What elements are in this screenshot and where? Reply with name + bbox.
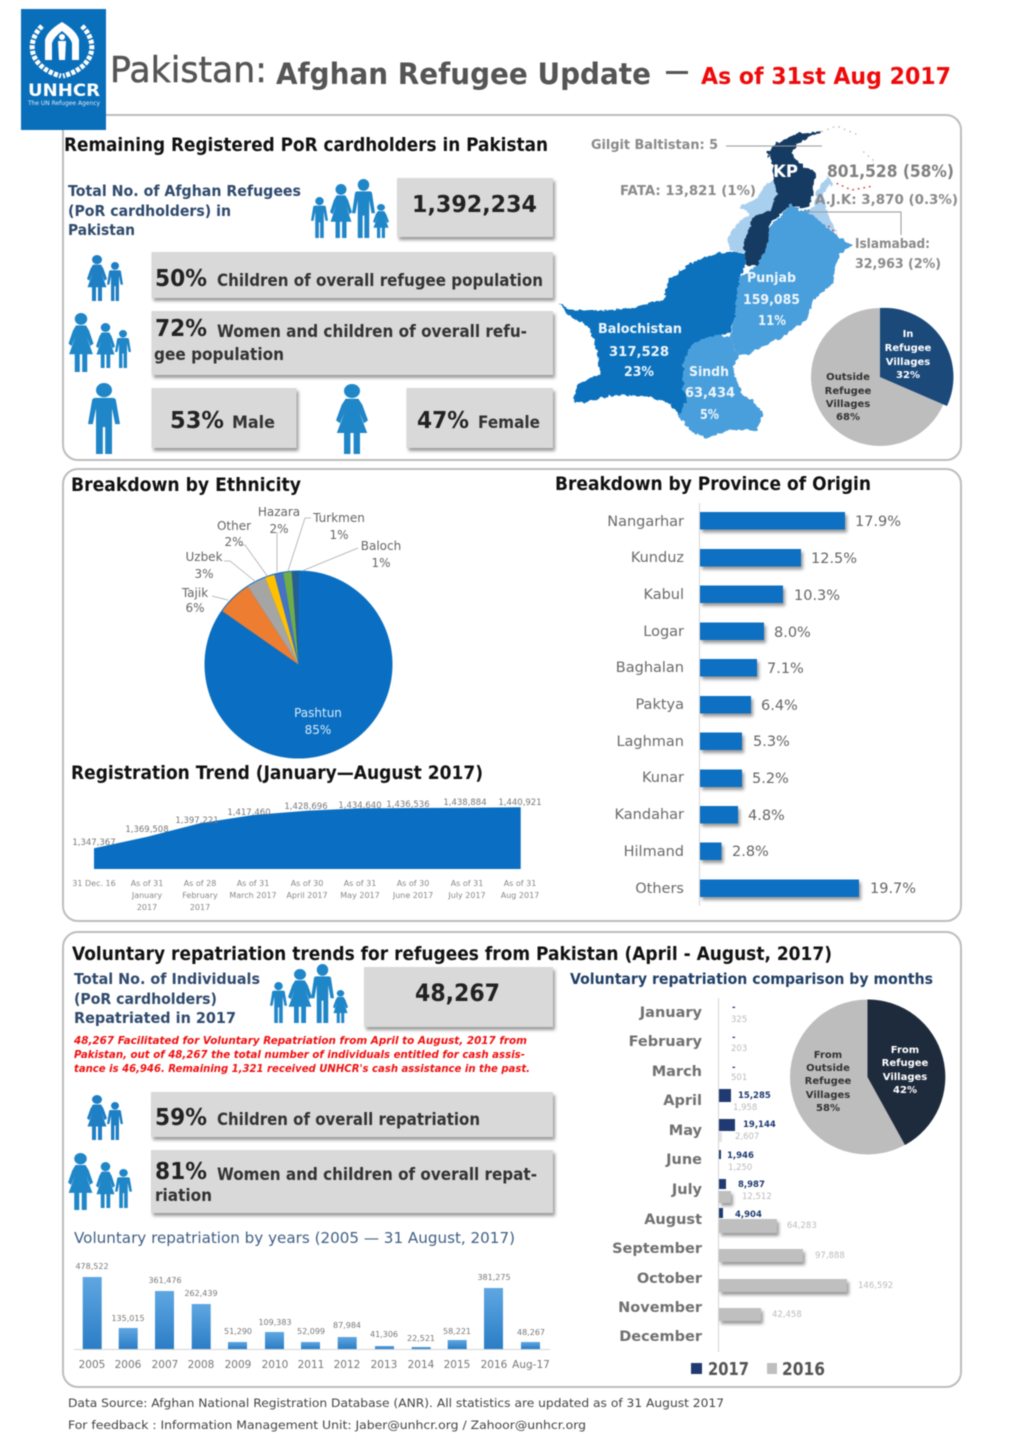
bar chart: province of origin: Kandahar — [615, 807, 684, 823]
pie chart: ethnicity: Other — [217, 519, 251, 533]
heading: breakdown by ethnicity: Breakdown by Ethnicity — [71, 474, 302, 496]
text: total number of refugees: (PoR cardholders) in — [68, 202, 231, 220]
icon: children — [87, 255, 123, 301]
pie: from refugee villages: Refugee — [805, 1076, 852, 1087]
map label: Islamabad — [805, 212, 941, 272]
bar chart: repatriation by years: 381,275 — [477, 1273, 511, 1282]
text: total number of refugees — [68, 182, 301, 239]
area chart: registration trend: As of 30 — [291, 879, 323, 888]
bar chart: province of origin: Others — [635, 881, 684, 897]
bar chart: repatriation by years: 2007 — [152, 1359, 178, 1371]
legend — [691, 1359, 825, 1380]
bar chart: repatriation by years: 51,290 — [224, 1327, 252, 1336]
bar chart: comparison by months: October — [637, 1271, 703, 1287]
map label: Punjab: 159,085 — [743, 292, 800, 308]
map label: Punjab: Punjab — [747, 270, 796, 286]
stat: 50% children: Children of overall refugee population — [217, 271, 543, 291]
bar chart: province of origin: Paktya — [635, 697, 684, 713]
bar chart: comparison by months: - — [732, 1003, 736, 1013]
area chart: registration trend: 1,440,921 — [498, 798, 542, 808]
footer: data source: For feedback : Information Management Unit: Jaber@unhcr.org / Zahoor@unhcr.org — [68, 1418, 586, 1432]
stat: 81% women and children: 81% — [155, 1159, 207, 1185]
text: total number of refugees: Total No. of Afghan Refugees — [68, 182, 301, 200]
bar chart: repatriation by years: 2010 — [262, 1359, 288, 1371]
bar chart: comparison by months: July — [671, 1182, 703, 1198]
stat: 50% children — [152, 252, 553, 298]
pie chart: ethnicity: Pashtun — [294, 706, 342, 720]
map label: Gilgit Baltistan: Gilgit Baltistan: 5 — [591, 137, 718, 153]
text: total individuals repatriated: (PoR cardholders) — [74, 990, 217, 1008]
footer: data source — [68, 1396, 724, 1432]
heading: breakdown by province: Breakdown by Province of Origin — [555, 473, 871, 495]
text: red note — [73, 1035, 530, 1075]
area chart: registration trend: 2017 — [137, 903, 157, 912]
bar chart: comparison by months: May — [669, 1123, 703, 1139]
pie: in / outside refugee villages: 32% — [896, 370, 920, 381]
area chart: registration trend: 1,347,367 — [72, 838, 116, 848]
stat: total refugees — [397, 178, 553, 237]
area chart: registration trend: As of 28 — [184, 879, 216, 888]
icon: female — [336, 384, 368, 454]
bar chart: province of origin: 8.0% — [774, 625, 811, 641]
pie: from refugee villages: Outside — [806, 1063, 850, 1074]
bar chart: province of origin: Kunduz — [631, 550, 684, 566]
icon: male — [88, 383, 120, 454]
map label: Punjab: 11% — [758, 313, 786, 329]
pie: from refugee villages: 58% — [816, 1103, 840, 1114]
area chart: registration trend: 1,417,460 — [227, 808, 271, 818]
area chart: registration trend: 1,397,221 — [175, 816, 219, 826]
bar chart: repatriation by years: 58,221 — [443, 1327, 471, 1336]
stat: 81% women and children: Women and children of overall repat- — [217, 1165, 537, 1185]
icon: woman and children — [68, 1153, 132, 1210]
map label: Balochistan: Balochistan — [598, 321, 682, 337]
map label: Islamabad: 32,963 (2%) — [855, 256, 941, 272]
stat: 72% women and children: 72% — [155, 316, 207, 342]
area chart: registration trend: 1,369,508 — [125, 825, 169, 835]
stat: 59% children: Children of overall repatriation — [217, 1110, 480, 1130]
bar chart: province of origin: Kunar — [642, 770, 684, 786]
bar chart: comparison by months: 1,250 — [728, 1163, 752, 1173]
bar chart: comparison by months: June — [665, 1152, 702, 1168]
stat: 59% children — [151, 1092, 553, 1137]
stat: 53% male — [152, 388, 296, 448]
bar chart: province of origin: 12.5% — [811, 551, 857, 567]
bar chart: repatriation by years: 2016 — [481, 1359, 508, 1371]
text: red note: Pakistan, out of 48,267 the total number of individuals entitled for cash assis- — [74, 1049, 525, 1061]
heading: remaining registered: Remaining Registered PoR cardholders in Pakistan — [64, 134, 548, 156]
title — [110, 50, 951, 91]
bar chart: comparison by months: 64,283 — [787, 1221, 817, 1231]
title: Pakistan: — [110, 50, 267, 91]
bar chart: comparison by months: 501 — [731, 1073, 747, 1083]
pie chart: ethnicity: Tajik — [181, 586, 208, 600]
bar chart: repatriation by years: 2011 — [298, 1359, 324, 1371]
map label: Balochistan — [598, 321, 682, 380]
area chart: registration trend: July 2017 — [447, 891, 486, 900]
area chart: registration trend: 1,434,640 — [338, 801, 382, 811]
area chart: registration trend: March 2017 — [229, 891, 277, 900]
legend: 2017 — [708, 1359, 749, 1380]
bar chart: province of origin: 19.7% — [870, 881, 916, 897]
bar chart: repatriation by years: 2005 — [79, 1359, 105, 1371]
area chart: registration trend: As of 30 — [397, 879, 429, 888]
bar chart: comparison by months: September — [612, 1241, 703, 1257]
bar chart: province of origin: Kabul — [643, 587, 684, 603]
area chart: registration trend: February — [182, 891, 218, 900]
stat: 53% male: 53% — [170, 408, 224, 434]
bar chart: repatriation by years: 2009 — [225, 1359, 251, 1371]
pie chart: ethnicity: 2% — [224, 535, 244, 549]
bar chart: comparison by months: 325 — [731, 1015, 747, 1025]
bar chart: province of origin: Hilmand — [624, 844, 684, 860]
area chart: registration trend: June 2017 — [392, 891, 433, 900]
pie chart: ethnicity: 85% — [305, 723, 331, 737]
icon: family — [270, 964, 348, 1023]
bar chart: comparison by months: 203 — [731, 1044, 747, 1054]
bar chart: repatriation by years: 2006 — [115, 1359, 142, 1371]
bar chart: repatriation by years: 2014 — [408, 1359, 435, 1371]
bar chart: province of origin: Baghalan — [616, 660, 684, 676]
bar chart: comparison by months: March — [652, 1064, 702, 1080]
pie: from refugee villages: 42% — [893, 1085, 917, 1096]
pie: in / outside refugee villages: Outside — [826, 372, 870, 383]
map label: KP: 801,528 (58%) — [827, 162, 954, 182]
bar chart: comparison by months: - — [732, 1063, 736, 1073]
pie: in / outside refugee villages: Villages — [886, 357, 930, 368]
bar chart: comparison by months: 15,285 — [738, 1091, 771, 1101]
area chart: registration trend: January — [131, 891, 162, 900]
bar chart: comparison by months: 1,946 — [727, 1151, 754, 1161]
bar chart: province of origin: Nangarhar — [607, 514, 684, 530]
icon: children — [87, 1095, 123, 1140]
area chart: registration trend: 1,436,536 — [386, 800, 430, 810]
panel: remaining registered PoR cardholders — [63, 115, 961, 460]
bar chart: repatriation by years: 361,476 — [148, 1276, 182, 1285]
area chart: registration trend: As of 31 — [237, 879, 269, 888]
bar chart: province of origin: 4.8% — [748, 808, 785, 824]
area chart: registration trend: As of 31 — [344, 879, 376, 888]
bar chart: repatriation by years: 2008 — [188, 1359, 214, 1371]
bar chart: province of origin: 10.3% — [794, 588, 840, 604]
area chart: registration trend: As of 31 — [504, 879, 536, 888]
bar chart: repatriation by years: 2015 — [444, 1359, 470, 1371]
bar chart: province of origin: Laghman — [616, 734, 684, 750]
stat: 47% female: Female — [478, 413, 540, 433]
bar chart: province of origin: 17.9% — [855, 514, 901, 530]
bar chart: repatriation by years: 41,306 — [370, 1330, 398, 1339]
pie: in / outside refugee villages: Villages — [826, 399, 870, 410]
text: red note: 48,267 Facilitated for Voluntary Repatriation from April to August, 2017 from — [73, 1035, 527, 1047]
map label: Sindh: 5% — [700, 407, 719, 423]
pie: from refugee villages: From — [814, 1050, 842, 1061]
bar chart: comparison by months: - — [732, 1033, 736, 1043]
bar chart: comparison by months: December — [619, 1329, 703, 1345]
text: red note: tance is 46,946. Remaining 1,321 received UNHCR's cash assistance in the past. — [74, 1063, 530, 1075]
area chart: registration trend: As of 31 — [131, 879, 163, 888]
text: total individuals repatriated — [74, 970, 260, 1027]
map label: Sindh — [685, 364, 735, 423]
map label: FATA: FATA: 13,821 (1%) — [620, 183, 756, 199]
stat: 72% women and children: Women and children of overall refu- — [217, 322, 527, 342]
bar chart: province of origin: 5.3% — [753, 734, 790, 750]
stat: 47% female: 47% — [417, 408, 469, 434]
legend: 2016 — [782, 1359, 825, 1380]
bar chart: repatriation by years: 262,439 — [184, 1289, 218, 1298]
stat: 59% children: 59% — [155, 1105, 207, 1131]
stat: total repatriated: 48,267 — [415, 979, 500, 1007]
area chart: registration trend: 1,438,884 — [443, 798, 487, 808]
bar chart: repatriation by years: 478,522 — [75, 1262, 109, 1271]
area chart: registration trend: 2017 — [190, 903, 210, 912]
area chart: registration trend: Aug 2017 — [501, 891, 539, 900]
bar chart: province of origin: 7.1% — [767, 661, 804, 677]
pie chart: ethnicity: 3% — [194, 567, 214, 581]
bar chart: province of origin: 5.2% — [752, 771, 789, 787]
text: total individuals repatriated: Total No. of Individuals — [74, 970, 260, 988]
logo: UNHCR: The UN Refugee Agency — [27, 100, 100, 107]
bar chart: comparison by months: April — [663, 1093, 702, 1109]
heading: comparison by months: Voluntary repatriation comparison by months — [570, 970, 933, 988]
stat: 81% women and children: riation — [155, 1186, 212, 1206]
pie: from refugee villages: From — [891, 1045, 919, 1056]
bar chart: repatriation by years: 22,521 — [407, 1334, 435, 1343]
stat: 53% male: Male — [232, 413, 275, 433]
bar chart: comparison by months: 2,607 — [735, 1132, 759, 1142]
pie chart: ethnicity: 1% — [371, 556, 391, 570]
pie: from refugee villages: Refugee — [882, 1058, 929, 1069]
bar chart: province of origin: 6.4% — [761, 698, 798, 714]
map label: AJK: A.J.K: 3,870 (0.3%) — [815, 192, 958, 208]
bar chart: comparison by months: 97,888 — [815, 1251, 845, 1261]
area chart: registration trend: 1,428,696 — [284, 802, 328, 812]
bar chart: comparison by months: August — [644, 1212, 702, 1228]
stat: 72% women and children: gee population — [154, 345, 284, 365]
map label: Balochistan: 23% — [624, 364, 654, 380]
area chart: registration trend: As of 31 — [451, 879, 483, 888]
panel: voluntary repatriation — [63, 932, 961, 1387]
bar chart: repatriation by years: Aug-17 — [512, 1359, 550, 1371]
stat: 81% women and children — [151, 1150, 553, 1213]
bar chart: comparison by months: 1,958 — [733, 1103, 757, 1113]
bar chart: comparison by months: 42,458 — [772, 1310, 802, 1320]
pie chart: ethnicity: 1% — [329, 528, 349, 542]
map of Pakistan — [558, 126, 958, 438]
footer: data source: Data Source: Afghan National Registration Database (ANR). All statistics are updated as of 31 August 2017 — [68, 1396, 724, 1410]
pie: from refugee villages: Villages — [806, 1090, 850, 1101]
map label: Islamabad: Islamabad: — [855, 236, 930, 252]
logo: UNHCR: UNHCR — [28, 81, 100, 101]
map label: Sindh: 63,434 — [685, 385, 735, 401]
bar chart: repatriation by years: 109,383 — [258, 1318, 292, 1327]
bar chart: repatriation by years: 48,267 — [517, 1328, 545, 1337]
map label: KP: KP — [773, 162, 798, 182]
map label: Balochistan: 317,528 — [609, 344, 669, 360]
bar chart: province of origin: 2.8% — [732, 844, 769, 860]
bar chart: comparison by months — [612, 998, 893, 1352]
bar chart: comparison by months: 4,904 — [735, 1210, 762, 1220]
pie chart: ethnicity: Turkmen — [312, 511, 365, 525]
area chart: registration trend: 31 Dec. 16 — [72, 879, 116, 888]
map label: KP — [773, 162, 954, 182]
heading: repatriation by years: Voluntary repatriation by years (2005 — 31 August, 2017) — [74, 1229, 515, 1247]
bar chart: repatriation by years: 52,099 — [297, 1327, 325, 1336]
pie chart: ethnicity: 6% — [185, 601, 205, 615]
text: total number of refugees: Pakistan — [68, 221, 135, 239]
pie: in / outside refugee villages — [811, 308, 953, 446]
area chart: registration trend: April 2017 — [286, 891, 328, 900]
title: Afghan Refugee Update — [276, 57, 651, 91]
bar chart: comparison by months: 12,512 — [742, 1192, 772, 1202]
pie chart: ethnicity: Uzbek — [185, 550, 223, 564]
bar chart: comparison by months: 146,592 — [858, 1281, 893, 1291]
map label: Sindh: Sindh — [689, 364, 729, 380]
area chart: registration trend — [72, 798, 542, 912]
bar chart: comparison by months: January — [639, 1005, 703, 1021]
bar chart: repatriation by years: 87,984 — [333, 1321, 361, 1330]
area chart: registration trend: May 2017 — [340, 891, 380, 900]
icon: woman and children — [68, 313, 131, 372]
stat: 47% female — [406, 388, 553, 448]
bar chart: province of origin: Logar — [643, 624, 684, 640]
bar chart: comparison by months: November — [618, 1300, 703, 1316]
heading: voluntary repatriation trends: Voluntary repatriation trends for refugees from Pakistan (April - August, 2017) — [72, 943, 832, 965]
logo: UNHCR — [21, 9, 106, 130]
pie chart: ethnicity: 2% — [269, 522, 289, 536]
bar chart: comparison by months: 19,144 — [743, 1120, 776, 1130]
bar chart: repatriation by years: 2013 — [371, 1359, 397, 1371]
pie: from refugee villages — [790, 999, 945, 1154]
pie: in / outside refugee villages: Refugee — [885, 343, 932, 354]
bar chart: repatriation by years: 2012 — [334, 1359, 360, 1371]
stat: total refugees: 1,392,234 — [412, 192, 537, 218]
text: total individuals repatriated: Repatriated in 2017 — [74, 1009, 236, 1027]
bar chart: repatriation by years — [74, 1262, 550, 1371]
bar chart: comparison by months: 8,987 — [738, 1180, 765, 1190]
pie: in / outside refugee villages: 68% — [836, 412, 860, 423]
title: As of 31st Aug 2017 — [701, 64, 951, 90]
stat: 50% children: 50% — [155, 266, 207, 292]
bar chart: repatriation by years: 135,015 — [111, 1314, 145, 1323]
bar chart: comparison by months: February — [629, 1034, 703, 1050]
icon: family — [311, 179, 389, 238]
stat: 72% women and children — [152, 311, 553, 375]
stat: total repatriated — [364, 967, 553, 1027]
bar chart: province of origin — [607, 503, 916, 906]
pie chart: ethnicity: Hazara — [258, 505, 300, 519]
pie chart: ethnicity — [181, 505, 401, 758]
pie: from refugee villages: Villages — [883, 1072, 927, 1083]
heading: registration trend: Registration Trend (January—August 2017) — [71, 762, 483, 784]
panel: ethnicity, registration trend and province of origin — [63, 469, 961, 921]
map label: Punjab — [743, 270, 800, 329]
pie: in / outside refugee villages: Refugee — [825, 386, 872, 397]
pie: in / outside refugee villages: In — [903, 329, 913, 340]
pie chart: ethnicity: Baloch — [361, 539, 401, 553]
